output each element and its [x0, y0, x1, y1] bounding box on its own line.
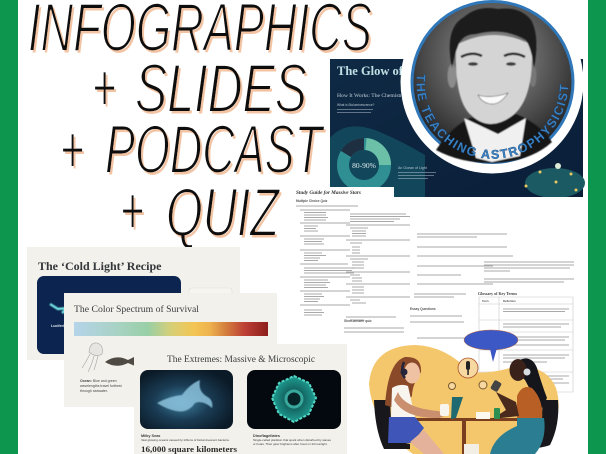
donut chart: 80-90%	[330, 126, 425, 197]
title: INFOGRAPHICS + SLIDES + PODCAST + QUIZ: PODCAST	[105, 111, 325, 188]
chairs	[374, 400, 410, 449]
portrait badge: THE TEACHING ASTROPHYSICIST	[416, 74, 568, 159]
glowing molecule	[50, 304, 68, 313]
slide heading: The Color Spectrum of Survival	[74, 304, 200, 314]
document section: Short-answer quiz: Short-answer quiz	[344, 319, 372, 323]
title: INFOGRAPHICS + SLIDES + PODCAST + QUIZ: +	[92, 49, 116, 126]
illustration: podcast	[369, 330, 559, 454]
bag	[464, 444, 479, 454]
document table: Glossary	[478, 291, 573, 392]
document text lines: column 2	[344, 214, 410, 332]
panel: extremes slide	[134, 344, 347, 454]
document table: Glossary: Definition	[503, 299, 516, 303]
illustration: fish	[105, 356, 136, 366]
spectrum bar	[74, 322, 268, 336]
slide subheading: How It Works: The Chemistry	[337, 93, 405, 99]
donut chart: 80-90%: 80-90%	[352, 161, 376, 170]
image: dinoflagellate	[247, 370, 341, 429]
panel: cold light recipe slide	[27, 247, 240, 360]
document text lines: long answers	[484, 262, 574, 282]
icon: microphone	[458, 358, 478, 378]
caption: Dinoflagellates: Single-celled plankton that spark when disturbed by waves	[253, 438, 331, 442]
title: INFOGRAPHICS + SLIDES + PODCAST + QUIZ: +	[120, 172, 144, 249]
text block: An Ocean of Light: An Ocean of Light	[398, 166, 427, 170]
portrait: man	[436, 8, 552, 163]
card label: Luciferin	[51, 324, 66, 328]
document section: Essay Questions: Essay Questions	[410, 307, 436, 311]
outlined card	[189, 288, 232, 328]
small text: definition: What is Bioluminescence?	[337, 103, 375, 107]
navy card	[37, 276, 181, 354]
document text lines: column 1	[296, 206, 358, 315]
caption: Dinoflagellates: or boats. Their glow brightens after hours in full sunlight.	[253, 442, 328, 446]
caption: ocean: through seawater.	[80, 389, 108, 393]
slide heading: The Glow of: The Glow of	[337, 64, 404, 78]
caption: Dinoflagellates	[253, 434, 331, 446]
laptop and cup	[440, 397, 500, 419]
caption: ocean: Ocean: Blue and green	[80, 379, 117, 383]
document text lines: column 3	[410, 234, 517, 338]
yellow blob	[369, 345, 559, 454]
image: milky seas	[140, 370, 233, 429]
illustration: fireflies	[524, 163, 585, 198]
portrait badge	[400, 0, 583, 174]
table	[412, 418, 522, 454]
panel: color spectrum slide	[64, 293, 277, 407]
illustration: jellyfish	[82, 343, 102, 372]
small text: definition	[337, 103, 375, 113]
stat: 16,000 square kilometers: 16,000 square kilometers	[141, 444, 238, 454]
caption: ocean: wavelengths travel furthest	[80, 384, 122, 388]
title: INFOGRAPHICS + SLIDES + PODCAST + QUIZ	[28, 0, 372, 251]
caption: Dinoflagellates: Dinoflagellates	[253, 434, 280, 438]
caption: Milky Seas: Vast glowing oceans caused by trillions of bioluminescent bacteria.	[141, 438, 230, 442]
white badge	[400, 0, 584, 174]
person right	[490, 358, 547, 454]
person left	[385, 357, 448, 454]
green border: right	[588, 0, 606, 454]
curved text: The Teaching Astrophysicist	[416, 74, 569, 159]
document table: Glossary: Glossary of Key Terms	[478, 291, 517, 296]
text block: An Ocean of Light	[398, 166, 436, 179]
caption: ocean	[80, 379, 122, 393]
document table: Glossary: Term	[482, 299, 489, 303]
title: INFOGRAPHICS + SLIDES + PODCAST + QUIZ: +	[60, 111, 84, 188]
document subheading: Multiple Choice Quiz	[296, 199, 328, 203]
caption: Milky Seas	[141, 434, 230, 442]
panel: study guide document	[295, 187, 583, 392]
slide heading: The Extremes: Massive & Microscopic	[167, 354, 315, 364]
green border: left	[0, 0, 18, 454]
title: INFOGRAPHICS + SLIDES + PODCAST + QUIZ: QUIZ	[166, 174, 281, 251]
blue ring	[412, 2, 573, 162]
caption: Milky Seas: Milky Seas	[141, 434, 160, 438]
panel: glow slide	[330, 59, 585, 198]
speech bubble	[464, 330, 518, 362]
title: INFOGRAPHICS + SLIDES + PODCAST + QUIZ: SLIDES	[135, 50, 307, 127]
slide heading: The ‘Cold Light’ Recipe	[38, 259, 162, 273]
icons: small reaction badges	[448, 381, 487, 390]
document title: Study Guide for Massive Stars	[296, 190, 361, 196]
